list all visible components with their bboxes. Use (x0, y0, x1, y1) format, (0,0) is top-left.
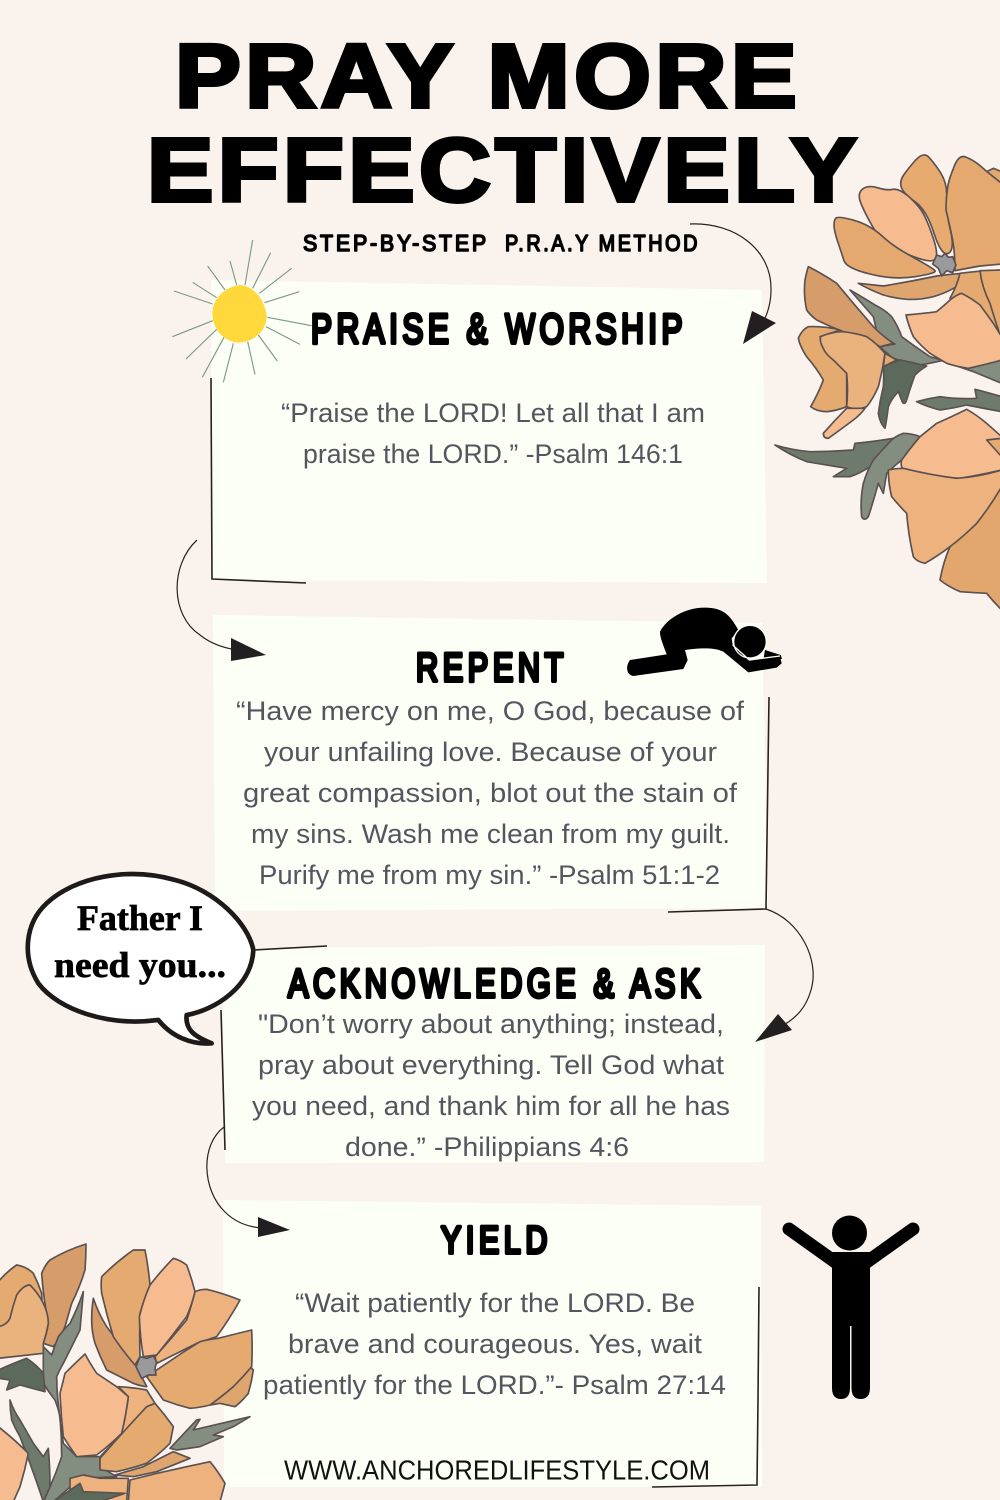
heading: repent: REPENT (416, 646, 568, 690)
corner lines: acknowledge panel (221, 946, 327, 1150)
quote: psalm 51: your unfailing love. Because of your (264, 737, 717, 767)
corner lines: praise panel (211, 378, 306, 583)
website url: WWW.ANCHOREDLIFESTYLE.COM (284, 1454, 710, 1486)
arrow: repent to acknowledge (755, 909, 813, 1042)
quote: psalm 146: “Praise the LORD! Let all that I am (281, 398, 705, 428)
heading: praise and worship: PRAISE & WORSHIP (311, 305, 687, 352)
heading: acknowledge and ask: ACKNOWLEDGE & ASK (288, 962, 705, 1006)
quote: philippians 4: done.” -Philippians 4:6 (345, 1132, 629, 1162)
icon: person with raised arms (789, 1216, 913, 1399)
panel: yield background (223, 1200, 762, 1487)
quote: philippians 4: "Don’t worry about anything; instead, (258, 1009, 724, 1039)
quote: psalm 51: great compassion, blot out the stain of (243, 778, 738, 808)
quote: psalm 51: my sins. Wash me clean from my guilt. (251, 819, 730, 849)
quote: psalm 27: brave and courageous. Yes, wait (288, 1329, 703, 1359)
subtitle: STEP-BY-STEP (303, 230, 489, 256)
arrow: subtitle to praise (690, 224, 776, 344)
corner lines: yield panel (652, 1287, 759, 1487)
title: EFFECTIVELY (147, 121, 861, 221)
quote: philippians 4 (252, 1009, 730, 1162)
arrow: acknowledge to yield (207, 1127, 290, 1237)
heading: yield: YIELD (441, 1220, 552, 1262)
arrow: praise to repent (177, 540, 266, 661)
panel: acknowledge and ask background (222, 945, 765, 1163)
flowers: top right (775, 155, 1000, 610)
quote: psalm 27: patiently for the LORD.”- Psalm 27:14 (263, 1370, 726, 1400)
quote: psalm 146: praise the LORD.” -Psalm 146:1 (303, 439, 683, 469)
quote: psalm 51 (236, 696, 745, 890)
quote: philippians 4: pray about everything. Tell God what (258, 1050, 725, 1080)
subtitle: P.R.A.Y METHOD (505, 230, 700, 256)
panel: repent background (213, 615, 768, 911)
quote: psalm 146 (281, 398, 705, 469)
icon: person bowing (627, 608, 782, 676)
speech bubble (28, 874, 253, 1044)
corner lines: repent panel (668, 697, 769, 912)
speech bubble: Father I (77, 898, 203, 938)
quote: psalm 27: “Wait patiently for the LORD. Be (295, 1288, 695, 1318)
speech bubble: need you... (54, 945, 226, 985)
subtitle (303, 230, 700, 256)
title: PRAY MORE (175, 27, 801, 127)
panel: praise and worship background (211, 280, 767, 583)
quote: psalm 51: Purify me from my sin.” -Psalm 51:1-2 (259, 860, 720, 890)
flowers: bottom left (0, 1244, 253, 1500)
quote: psalm 27 (263, 1288, 726, 1400)
icon: sun (172, 240, 312, 382)
quote: philippians 4: you need, and thank him for all he has (252, 1091, 730, 1121)
title (147, 27, 861, 221)
quote: psalm 51: “Have mercy on me, O God, because of (236, 696, 745, 726)
